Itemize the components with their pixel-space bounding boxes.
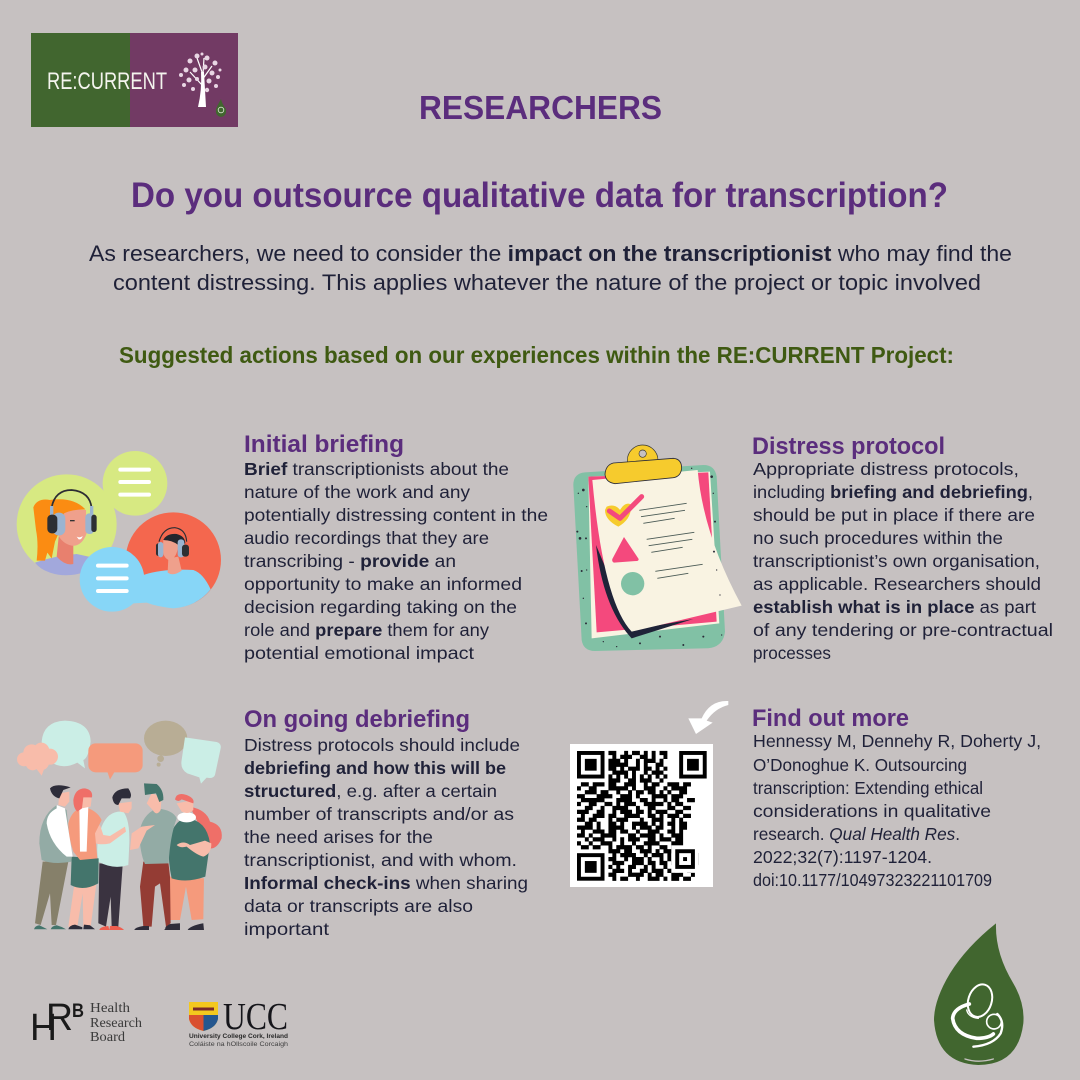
person 4 bbox=[130, 783, 177, 930]
text block: Distress protocol: processes bbox=[753, 643, 831, 663]
text block: Distress protocol bbox=[753, 459, 1053, 663]
text block: On going debriefing: Distress protocols should include bbox=[244, 735, 520, 755]
text block: Distress protocol: transcriptionist’s own organisation, bbox=[753, 551, 1040, 571]
subheading: suggested actions: Suggested actions based on our experiences within the RE:CURRENT Project: bbox=[119, 342, 954, 368]
text block: Distress protocol: establish what is in place as part bbox=[753, 597, 1036, 617]
logo: Health Research Board: Health bbox=[90, 1001, 130, 1016]
text block: Initial briefing: transcribing - provide an bbox=[244, 551, 456, 571]
text block: Initial briefing: opportunity to make an informed bbox=[244, 574, 522, 594]
person 3 bbox=[89, 788, 132, 930]
logo: Health Research Board: B bbox=[72, 1001, 84, 1022]
illustration: group of people talking with speech bubbles bbox=[17, 721, 222, 930]
text block: On going debriefing: Informal check-ins when sharing bbox=[244, 873, 528, 893]
text block: Distress protocol: as applicable. Researchers should bbox=[753, 574, 1041, 594]
logo: RE:CURRENT bbox=[31, 33, 238, 127]
text block: Initial briefing: potential emotional impact bbox=[244, 643, 474, 663]
intro paragraph: As researchers, we need to consider the impact on the transcriptionist who may find the bbox=[89, 241, 1012, 266]
icon: clipboard bbox=[573, 445, 742, 651]
text block: reference: Hennessy M, Dennehy R, Doherty J, bbox=[753, 731, 1041, 751]
heading: Distress protocol: Distress protocol bbox=[752, 433, 945, 460]
logo: Health Research Board: Board bbox=[90, 1030, 125, 1045]
logo: University College Cork: University College Cork, Ireland bbox=[189, 1034, 288, 1040]
text block: Initial briefing bbox=[244, 459, 548, 663]
arrow: pointing to QR code bbox=[688, 701, 728, 734]
QR code bbox=[570, 744, 713, 887]
text block: Distress protocol: including briefing and debriefing , bbox=[753, 482, 1033, 502]
text block: reference bbox=[753, 731, 1041, 890]
text block: reference: 2022;32(7):1197-1204. bbox=[753, 847, 932, 867]
text block: Distress protocol: Appropriate distress protocols, bbox=[753, 459, 1019, 479]
person 5 far right bbox=[165, 794, 222, 930]
logo: green drop with mother and baby bbox=[934, 923, 1024, 1065]
text block: On going debriefing: transcriptionist, and with whom. bbox=[244, 850, 517, 870]
intro paragraph bbox=[89, 241, 1012, 295]
text block: Initial briefing: potentially distressing content in the bbox=[244, 505, 548, 525]
text block: On going debriefing: important bbox=[244, 919, 329, 939]
text block: reference: transcription: Extending ethical bbox=[753, 778, 983, 798]
text block: Initial briefing: decision regarding taking on the bbox=[244, 597, 517, 617]
logo: University College Cork bbox=[189, 996, 288, 1048]
text block: Initial briefing: Brief transcriptionists about the bbox=[244, 459, 509, 479]
text block: reference: considerations in qualitative bbox=[753, 801, 991, 821]
text block: On going debriefing: data or transcripts are also bbox=[244, 896, 473, 916]
text block: Initial briefing: nature of the work and any bbox=[244, 482, 470, 502]
text block: Initial briefing: audio recordings that they are bbox=[244, 528, 489, 548]
logo: Health Research Board: Research bbox=[90, 1016, 142, 1031]
text block: Distress protocol: of any tendering or pre-contractual bbox=[753, 620, 1053, 640]
title question: Do you outsource qualitative data for transcription? bbox=[131, 176, 948, 215]
intro paragraph: content distressing. This applies whatever the nature of the project or topic involved bbox=[113, 270, 981, 295]
heading: Initial briefing: Initial briefing bbox=[244, 431, 404, 458]
logo: Health Research Board: R bbox=[46, 997, 73, 1039]
text block: reference: O’Donoghue K. Outsourcing bbox=[753, 755, 967, 775]
text block: On going debriefing: the need arises for the bbox=[244, 827, 433, 847]
logo: Health Research Board bbox=[30, 997, 142, 1049]
text block: reference: doi:10.1177/10497323221101709 bbox=[753, 870, 992, 890]
person 2 bbox=[68, 788, 102, 929]
heading: Find out more: Find out more bbox=[752, 705, 909, 732]
text block: Distress protocol: no such procedures within the bbox=[753, 528, 1003, 548]
text block: On going debriefing: number of transcripts and/or as bbox=[244, 804, 514, 824]
icon: transcriptionists with headphones and speech bubbles bbox=[17, 451, 221, 612]
logo: Health Research Board: H bbox=[30, 1007, 57, 1049]
text block: Distress protocol: should be put in place if there are bbox=[753, 505, 1035, 525]
logo: RE:CURRENT: RE:CURRENT bbox=[47, 68, 167, 95]
logo: University College Cork: Coláiste na hOllscoile Corcaigh bbox=[189, 1042, 288, 1048]
person 1 bbox=[34, 785, 73, 929]
heading: On going debriefing: On going debriefing bbox=[244, 706, 470, 733]
text block: On going debriefing bbox=[244, 735, 528, 939]
text block: On going debriefing: debriefing and how this will be bbox=[244, 758, 506, 778]
text block: Initial briefing: role and prepare them for any bbox=[244, 620, 489, 640]
heading: RESEARCHERS: RESEARCHERS bbox=[419, 89, 662, 126]
logo: University College Cork: UCC bbox=[223, 996, 288, 1038]
text block: reference: research. Qual Health Res. bbox=[753, 824, 960, 844]
text block: On going debriefing: structured, e.g. after a certain bbox=[244, 781, 497, 801]
